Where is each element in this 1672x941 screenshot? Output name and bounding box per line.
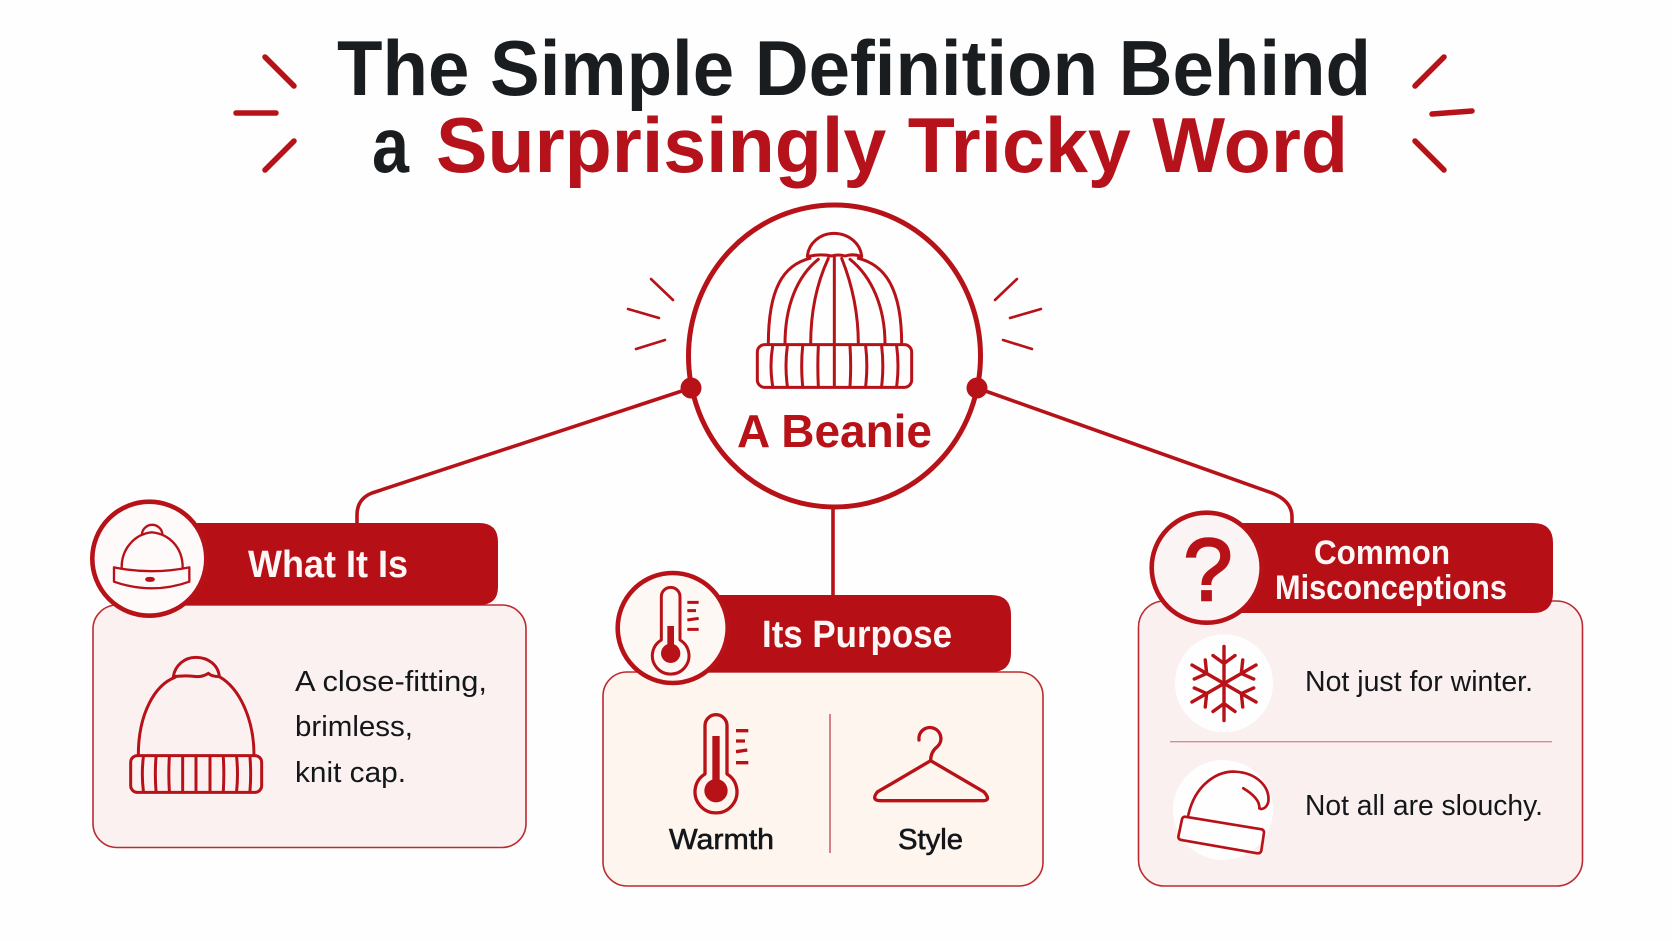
heading: Misconceptions <box>1275 569 1507 607</box>
icon: beanie left rays <box>628 279 673 349</box>
panel: Common Misconceptions <box>1138 513 1582 886</box>
icon: title right burst rays <box>1415 57 1472 170</box>
card <box>1138 601 1582 886</box>
icon: thermometer <box>695 715 748 813</box>
icon: title left burst rays <box>236 57 294 170</box>
text: not all are slouchy: Not all are slouchy. <box>1305 790 1543 822</box>
icon: right connection dot <box>966 378 988 398</box>
icon: left connection dot <box>680 378 702 398</box>
connector: centre branch <box>831 508 835 597</box>
heading: Its Purpose <box>762 614 952 656</box>
description: A close-fitting, <box>295 666 487 698</box>
panel: What It Is <box>92 502 526 848</box>
icon badge: question mark: ? <box>1184 520 1232 619</box>
panel: central A Beanie circle <box>680 205 988 507</box>
header banner <box>149 523 498 605</box>
title: The Simple Definition Behind <box>337 24 1371 112</box>
card <box>603 672 1043 886</box>
label: A Beanie: A Beanie <box>737 405 932 457</box>
card <box>93 605 526 848</box>
icon: snowflake <box>1175 634 1273 732</box>
label: Style: Style <box>898 824 963 856</box>
icon: ribbed beanie <box>757 233 912 387</box>
heading: What It Is <box>248 544 408 586</box>
title: Surprisingly Tricky Word <box>436 101 1348 189</box>
icon: beanie right rays <box>995 279 1041 349</box>
icon: beanie with cuff <box>131 657 262 792</box>
title: a <box>372 101 410 189</box>
header banner <box>673 595 1011 672</box>
heading <box>1275 534 1507 607</box>
panel: Its Purpose <box>603 573 1043 886</box>
connector: left branch <box>357 388 691 525</box>
heading: Common <box>1314 534 1450 572</box>
description: brimless, <box>295 711 413 743</box>
icon: slouchy beanie <box>1173 760 1273 860</box>
icon badge: small beanie <box>92 502 206 616</box>
text: not just for winter: Not just for winter. <box>1305 666 1533 698</box>
title <box>337 24 1371 189</box>
header banner <box>1207 523 1553 613</box>
icon badge: question mark <box>1152 513 1262 623</box>
label: Warmth: Warmth <box>669 824 774 856</box>
description: knit cap. <box>295 757 406 789</box>
description <box>295 666 487 789</box>
icon badge: thermometer <box>618 573 728 683</box>
icon: hanger <box>875 728 988 801</box>
connector: right branch <box>977 388 1292 525</box>
